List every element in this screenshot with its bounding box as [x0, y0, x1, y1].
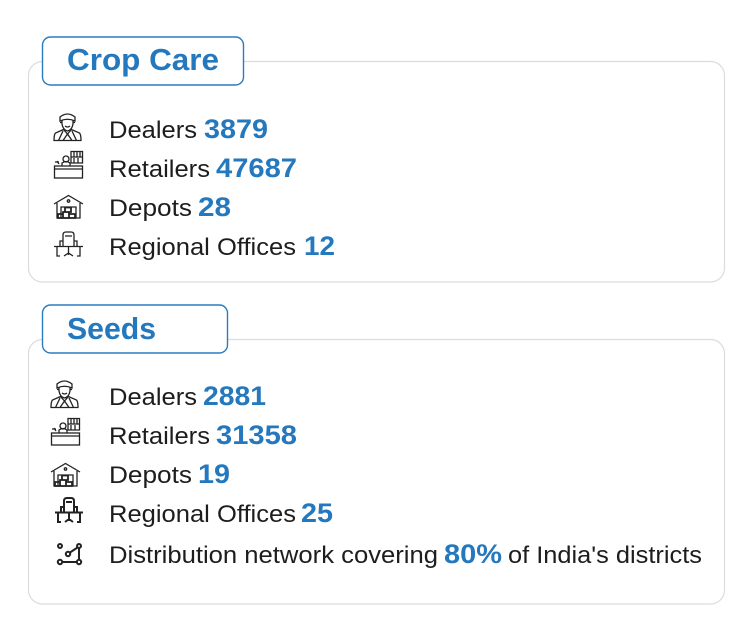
row: retailers 31358: 31358 — [216, 420, 297, 450]
row: depots 19 — [51, 459, 230, 489]
row: retailers 47687: Retailers — [109, 156, 210, 183]
row: depots 28: 28 — [198, 192, 231, 222]
row: retailers 31358 — [52, 418, 297, 450]
heading: crop care — [42, 37, 244, 85]
row: depots 19: 19 — [198, 459, 230, 489]
row: dealers 3879: Dealers — [109, 117, 197, 144]
row: dealers 3879: 3879 — [204, 114, 268, 144]
icon: regional office — [54, 232, 83, 256]
heading: seeds: Seeds — [67, 311, 156, 346]
row: regional offices 12: 12 — [304, 231, 335, 261]
icon: depot — [51, 464, 80, 486]
row: distribution network 80%: Distribution network covering — [109, 542, 438, 569]
heading: crop care: Crop Care — [67, 42, 219, 77]
icon: retailer — [54, 152, 82, 178]
row: regional offices 25: 25 — [301, 498, 333, 528]
icon: network — [58, 544, 81, 564]
row: regional offices 12 — [54, 231, 335, 261]
row: depots 19: Depots — [109, 462, 192, 489]
icon: retailer — [52, 418, 80, 445]
row: dealers 3879 — [54, 114, 268, 144]
row: dealers 2881: Dealers — [109, 384, 197, 411]
heading: seeds — [42, 305, 228, 353]
icon: regional office — [55, 498, 83, 522]
icon: dealer — [54, 114, 81, 140]
row: dealers 2881 — [51, 381, 266, 411]
row: retailers 47687: 47687 — [216, 153, 297, 183]
row: distribution network 80%: 80% — [444, 539, 502, 569]
row: depots 28: Depots — [109, 195, 192, 222]
row: depots 28 — [54, 192, 231, 222]
row: regional offices 25: Regional Offices — [109, 501, 296, 528]
icon: dealer — [51, 381, 78, 408]
panel: crop care — [28, 37, 724, 282]
row: regional offices 12: Regional Offices — [109, 234, 296, 261]
panel: seeds — [28, 305, 724, 604]
row: retailers 47687 — [54, 152, 297, 183]
row: retailers 31358: Retailers — [109, 423, 210, 450]
row: distribution network 80%: of India's districts — [508, 542, 702, 569]
row: regional offices 25 — [55, 498, 333, 528]
row: distribution network 80% — [58, 539, 702, 569]
row: dealers 2881: 2881 — [203, 381, 266, 411]
icon: depot — [54, 196, 83, 218]
